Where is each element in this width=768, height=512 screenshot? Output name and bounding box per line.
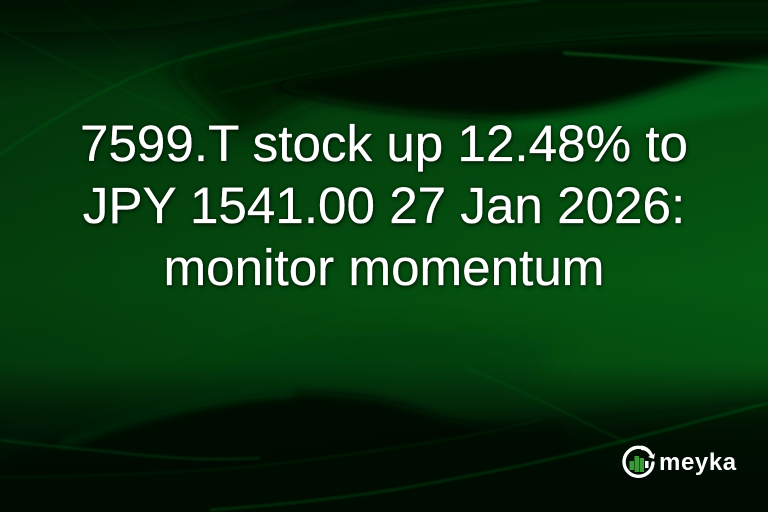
title: monitor momentum <box>164 239 604 296</box>
logo: meyka <box>622 446 737 478</box>
title: JPY 1541.00 27 Jan 2026: <box>83 177 685 234</box>
icon: ring with bars <box>624 446 655 476</box>
top light lines <box>0 0 539 155</box>
title <box>80 115 689 296</box>
top dark shapes <box>0 0 539 32</box>
title: 7599.T stock up 12.48% to <box>80 115 688 172</box>
bottom waves <box>0 330 560 450</box>
wordmark: meyka <box>659 449 737 476</box>
